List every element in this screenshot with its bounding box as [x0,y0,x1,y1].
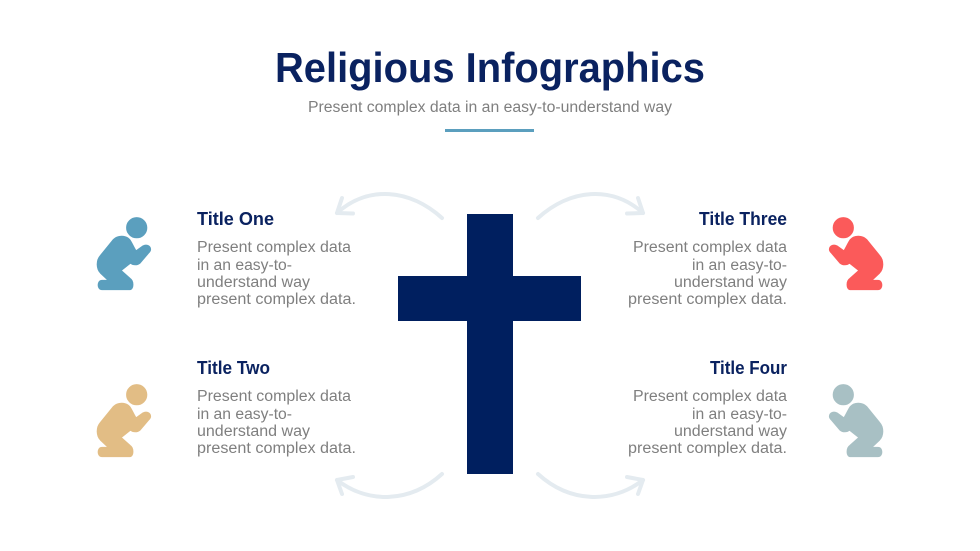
text block: title two: present complex data. [197,440,356,457]
text block: title three: Present complex data [633,239,787,256]
text block: title four: Title Four [710,358,787,378]
text block: title four: understand way [674,423,787,440]
arrow: bottom right [538,474,643,497]
text block: title four: present complex data. [628,440,787,457]
arrow: top left [337,194,442,218]
text block: title three: understand way [674,274,787,291]
text block: title three: Title Three [699,209,787,229]
text block: title four: in an easy-to- [692,406,787,423]
text block: title one [197,209,356,308]
icon: praying person tan [97,385,150,456]
text block: title one: Present complex data [197,239,351,256]
text block: title two: Present complex data [197,388,351,405]
icon: praying person red [830,218,883,290]
text block: title three [628,209,787,308]
text block: title one: present complex data. [197,291,356,308]
text block: title two: understand way [197,423,310,440]
text block: title one: Title One [197,209,274,229]
icon: praying person blue [97,218,150,290]
text block: title two: Title Two [197,358,270,378]
title underline [445,129,534,132]
text block: title three: in an easy-to- [692,257,787,274]
text block: title one: understand way [197,274,310,291]
title: Religious Infographics [275,44,705,91]
text block: title three: present complex data. [628,291,787,308]
icon: praying person grey [830,385,883,456]
text block: title two [197,358,356,457]
arrow: top right [538,194,643,218]
text block: title four [628,358,787,457]
icon: cross [398,214,581,474]
text block: title one: in an easy-to- [197,257,292,274]
text block: title two: in an easy-to- [197,406,292,423]
text block: title four: Present complex data [633,388,787,405]
subtitle: Present complex data in an easy-to-understand way [308,99,672,116]
arrow: bottom left [337,474,442,497]
